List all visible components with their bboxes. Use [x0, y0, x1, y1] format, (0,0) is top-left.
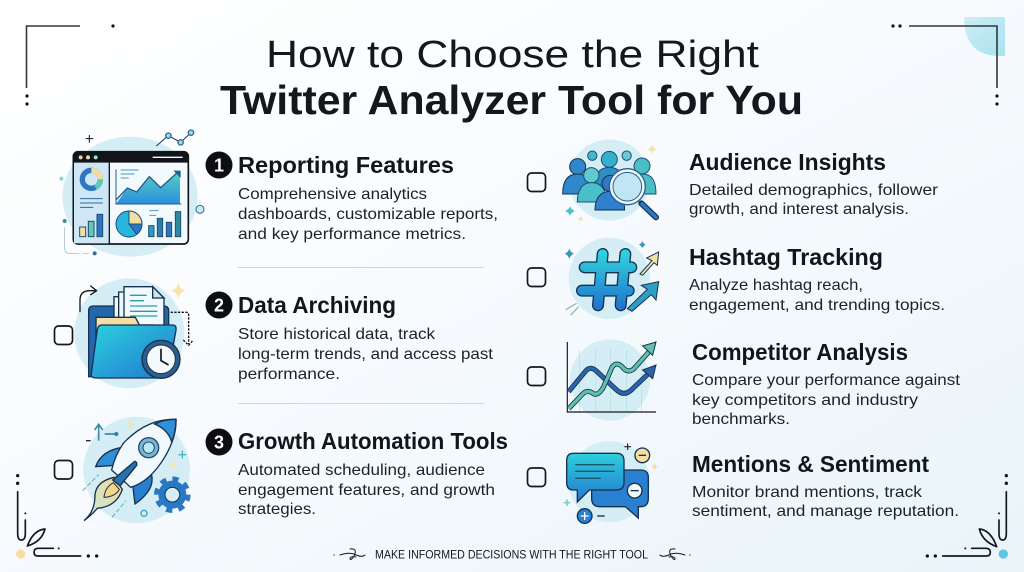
text: Mentions & Sentiment description: [692, 484, 959, 520]
text: Data Archiving description: Store historical data, track: [238, 326, 436, 343]
text: Hashtag Tracking description: Analyze hashtag reach,: [689, 277, 863, 294]
number badge 3: 3: [214, 432, 224, 452]
icon: rocket and gear: [83, 417, 190, 523]
text: Growth Automation Tools description: [238, 462, 495, 518]
text: Reporting Features description: Comprehensive analytics: [238, 186, 427, 203]
checkbox: Data Archiving: [54, 326, 72, 344]
text: Reporting Features description: [238, 186, 498, 243]
icon: data archive folder: [74, 278, 193, 388]
title: [220, 34, 803, 123]
checkbox: Hashtag Tracking: [528, 268, 546, 286]
title: Twitter Analyzer Tool for You: [220, 77, 803, 123]
text: Growth Automation Tools description: strategies.: [238, 501, 316, 518]
number badge 1: [206, 152, 232, 178]
heading: Competitor Analysis: Competitor Analysis: [692, 339, 908, 365]
checkbox: Mentions & Sentiment: [528, 468, 546, 486]
title: How to Choose the Right: [266, 34, 760, 76]
text: Data Archiving description: long-term trends, and access past: [238, 346, 494, 363]
heading: Mentions & Sentiment: Mentions & Sentiment: [692, 451, 929, 477]
text: Hashtag Tracking description: [689, 277, 945, 314]
text: Audience Insights description: [689, 182, 939, 218]
icon: speech bubbles: [564, 441, 658, 523]
text: Competitor Analysis description: key competitors and industry: [692, 392, 918, 409]
top-right corner ornament: [891, 17, 1005, 106]
text: Growth Automation Tools description: engagement features, and growth: [238, 482, 495, 499]
number badge 2: 2: [214, 296, 224, 316]
number badge 1: 1: [214, 156, 224, 176]
heading: Data Archiving: Data Archiving: [238, 292, 396, 318]
text: Data Archiving description: [238, 326, 494, 383]
checkbox: Competitor Analysis: [528, 367, 546, 386]
text: Competitor Analysis description: benchmarks.: [692, 411, 790, 428]
checkbox: Audience Insights: [528, 173, 546, 192]
heading: Hashtag Tracking: Hashtag Tracking: [689, 244, 883, 270]
text: Data Archiving description: performance.: [238, 366, 340, 383]
heading: Growth Automation Tools: Growth Automation Tools: [238, 428, 508, 454]
text: Growth Automation Tools description: Automated scheduling, audience: [238, 462, 485, 479]
checkbox: Growth Automation Tools: [54, 460, 72, 479]
top-left corner ornament: [25, 24, 115, 106]
bottom-right corner ornament: [926, 474, 1008, 559]
text: Reporting Features description: dashboards, customizable reports,: [238, 206, 498, 223]
icon: reporting dashboard: [59, 130, 204, 257]
icon: audience with magnifier: [563, 139, 656, 222]
number badge 3: [206, 428, 232, 456]
icon: competitor trend chart: [567, 339, 656, 421]
text: Competitor Analysis description: Compare your performance against: [692, 372, 961, 389]
text: Audience Insights description: Detailed demographics, follower: [689, 182, 939, 199]
heading: Reporting Features: Reporting Features: [238, 152, 454, 178]
text: Mentions & Sentiment description: Monitor brand mentions, track: [692, 484, 923, 501]
heading: Audience Insights: Audience Insights: [689, 149, 886, 175]
number badge 2: [206, 292, 232, 318]
bottom-left corner ornament: [16, 474, 98, 559]
text: Audience Insights description: growth, and interest analysis.: [689, 201, 909, 218]
text: Reporting Features description: and key performance metrics.: [238, 226, 466, 243]
text: Competitor Analysis description: [692, 372, 961, 428]
text: Hashtag Tracking description: engagement, and trending topics.: [689, 297, 945, 314]
icon: hashtag with arrows: [565, 238, 659, 319]
footer tagline: MAKE INFORMED DECISIONS WITH THE RIGHT TOOL: [375, 550, 649, 562]
text: Mentions & Sentiment description: sentiment, and manage reputation.: [692, 503, 959, 520]
